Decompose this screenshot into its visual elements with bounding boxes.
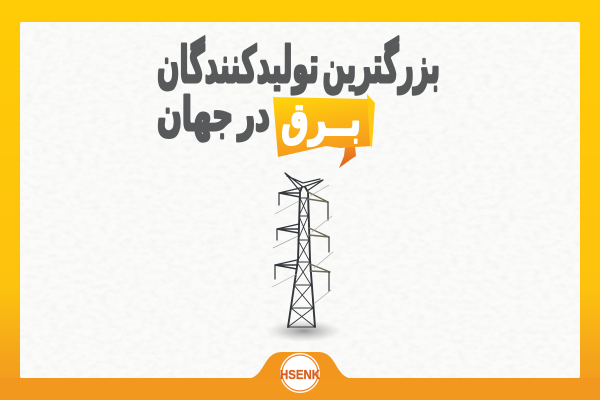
ribbon tail	[339, 146, 356, 168]
top arms	[285, 173, 323, 191]
ribbon word: بــرق	[281, 92, 361, 146]
transmission tower	[266, 173, 342, 342]
title line 2: در جهان	[157, 87, 270, 141]
logo badge	[280, 353, 320, 393]
ribbon fold	[367, 94, 375, 147]
logo tab	[246, 352, 354, 379]
ribbon: برق	[273, 92, 375, 168]
insulators	[275, 193, 329, 291]
logo text: HSENK	[280, 368, 320, 382]
tower legs	[288, 187, 315, 327]
cross arms	[279, 188, 300, 197]
tower shadow	[266, 320, 342, 342]
faint wires	[272, 185, 333, 303]
bottom orange band	[0, 352, 600, 400]
